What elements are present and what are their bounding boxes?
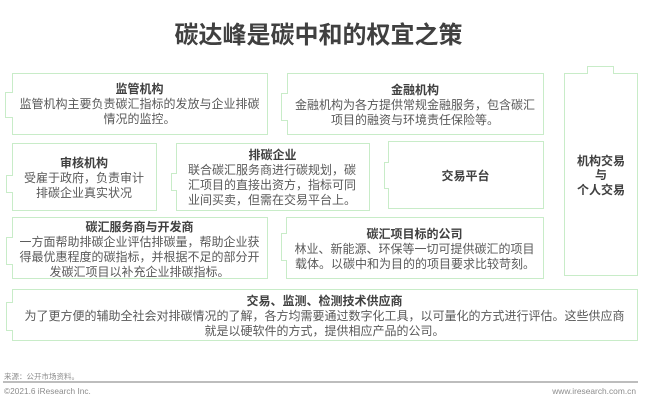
panel: regulators: 监管机构 — [115, 82, 164, 96]
panel: regulators: 监管机构主要负责碳汇指标的发放与企业排碳 — [19, 97, 260, 111]
panel: institutional and personal trading — [577, 154, 625, 196]
panel: carbon sink service providers and developers: 一方面帮助排碳企业评估排碳量，帮助企业获 — [19, 235, 260, 249]
panel: institutional and personal trading: 个人交易 — [577, 182, 625, 196]
footer rule — [3, 381, 638, 383]
panel: institutional and personal trading: 机构交易 — [577, 154, 625, 168]
panel: carbon sink project companies: 林业、新能源、环保等一切可提供碳汇的项目 — [294, 242, 534, 256]
panel: financial institutions: 金融机构 — [391, 83, 439, 97]
panel: institutional and personal trading: 与 — [595, 168, 607, 182]
panel: carbon sink service providers and developers: 得最优惠程度的碳指标，并根据不足的部分开 — [19, 250, 260, 264]
panel: financial institutions: 金融机构为各方提供常规金融服务，包含碳汇 — [295, 98, 535, 112]
panel: trading, monitoring and testing technology suppliers: 交易、监测、检测技术供应商 — [246, 294, 402, 308]
panel: carbon sink project companies: 载体。以碳中和为目的的项目要求比较苛刻。 — [295, 257, 535, 271]
copyright: ©2021.6 iResearch Inc. — [4, 386, 91, 396]
panel: financial institutions: 项目的融资与环境责任保险等。 — [331, 113, 499, 127]
panel: trading platform: 交易平台 — [441, 169, 490, 183]
panel: carbon sink service providers and developers: 碳汇服务商与开发商 — [85, 220, 194, 234]
panel: financial institutions — [295, 83, 535, 127]
panel: trading, monitoring and testing technology suppliers: 就是以硬软件的方式，提供相应产品的公司。 — [204, 324, 444, 338]
panel: emitting enterprises — [188, 148, 356, 207]
panel: carbon sink service providers and developers: 发碳汇项目以补充企业排碳指标。 — [49, 265, 230, 279]
panel: emitting enterprises: 联合碳汇服务商进行碳规划，碳 — [188, 163, 356, 177]
panel: regulators — [19, 82, 260, 126]
panel: carbon sink project companies — [294, 227, 535, 271]
panel: audit institutions: 排碳企业真实状况 — [36, 186, 132, 200]
website: www.iresearch.com.cn — [552, 386, 636, 396]
panel: regulators: 情况的监控。 — [103, 112, 176, 126]
panel: emitting enterprises: 业间买卖，但需在交易平台上。 — [188, 193, 356, 207]
panel: audit institutions: 受雇于政府，负责审计 — [24, 171, 144, 185]
panel: audit institutions: 审核机构 — [60, 156, 108, 170]
panel: audit institutions — [24, 156, 144, 200]
panel: carbon sink project companies: 碳汇项目标的公司 — [366, 227, 462, 241]
panel: trading, monitoring and testing technology suppliers: 为了更方便的辅助全社会对排碳情况的了解，各方均需要通过数字化工具，以可量化的方式进行评估。这些供应商 — [24, 309, 624, 323]
panel: emitting enterprises: 排碳企业 — [248, 148, 296, 162]
source note: 来源：公开市场资料。 — [4, 372, 79, 381]
panel: carbon sink service providers and developers — [19, 220, 260, 279]
title: 碳达峰是碳中和的权宜之策 — [174, 22, 462, 49]
panel: emitting enterprises: 汇项目的直接出资方，指标可同 — [188, 178, 356, 192]
panel: trading, monitoring and testing technology suppliers — [24, 294, 624, 338]
